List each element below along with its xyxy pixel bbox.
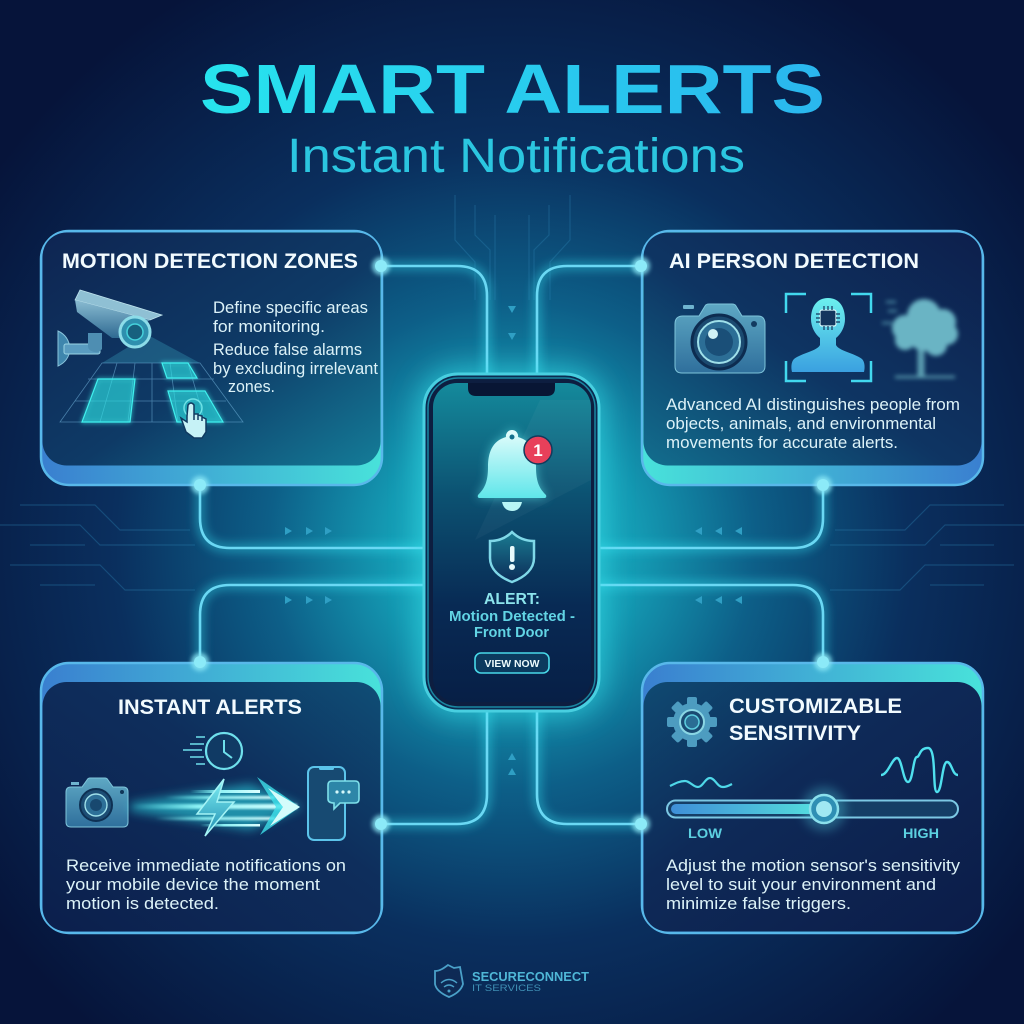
body text: Adjust the motion sensor's sensitivity	[666, 857, 961, 875]
button: view now	[475, 653, 549, 673]
body text: zones.	[228, 378, 275, 396]
icon: notification badge	[524, 436, 552, 464]
logo: SecureConnect IT Services: IT SERVICES	[472, 983, 541, 993]
body text: level to suit your environment and	[666, 876, 936, 894]
body text: motion is detected.	[66, 895, 219, 913]
heading: MOTION DETECTION ZONES	[62, 250, 358, 273]
body text: Advanced AI distinguishes people from	[666, 396, 960, 414]
slider labels: HIGH	[903, 825, 939, 841]
slider labels: LOW	[688, 825, 723, 841]
icon: camera	[66, 778, 128, 827]
panel: AI person detection	[642, 231, 983, 485]
heading: SENSITIVITY	[729, 722, 861, 745]
icon: bell	[478, 430, 546, 511]
heading	[729, 695, 902, 745]
body text	[666, 396, 960, 452]
body text: movements for accurate alerts.	[666, 434, 898, 452]
body text: Define specific areas	[213, 299, 368, 317]
body text: by excluding irrelevant	[213, 360, 378, 378]
body text	[213, 299, 378, 396]
icon: notification badge: 1	[533, 441, 543, 460]
body text: minimize false triggers.	[666, 895, 851, 913]
body text: your mobile device the moment	[66, 876, 320, 894]
panel: motion detection zones	[41, 231, 382, 485]
slider	[667, 787, 958, 831]
alert text: ALERT:	[484, 591, 540, 608]
icon: high wave	[881, 748, 958, 792]
subtitle: Instant Notifications	[287, 130, 745, 183]
alert text	[449, 591, 575, 641]
alert text: Front Door	[474, 625, 549, 641]
icon: lightning bolt	[197, 779, 234, 836]
icon: low wave	[670, 778, 732, 787]
body text: objects, animals, and environmental	[666, 415, 936, 433]
connector nodes	[191, 257, 832, 833]
alert text: Motion Detected -	[449, 609, 575, 625]
heading: AI PERSON DETECTION	[669, 250, 919, 273]
body text: for monitoring.	[213, 318, 325, 336]
icon: gear	[667, 697, 717, 747]
icon: shield alert	[490, 532, 534, 582]
icon: phone with chat bubble	[308, 767, 359, 840]
body text: Receive immediate notifications on	[66, 857, 346, 875]
icon: security camera and floor grid	[58, 290, 243, 438]
flow arrows	[285, 306, 742, 775]
notch	[468, 383, 555, 396]
logo: SecureConnect IT Services: SECURECONNECT	[472, 970, 589, 984]
icon: fast clock	[183, 733, 242, 769]
slider labels	[688, 825, 939, 841]
circuit traces	[0, 195, 1024, 590]
title: SMART ALERTS	[200, 50, 825, 128]
body text: Reduce false alarms	[213, 341, 362, 359]
icon: camera	[675, 304, 765, 373]
arrow: speed streaks	[130, 777, 302, 835]
heading: INSTANT ALERTS	[118, 696, 302, 719]
icon: blurred tree	[882, 299, 958, 378]
connector lines	[200, 266, 823, 824]
body text	[66, 857, 346, 913]
logo: SecureConnect IT Services	[435, 965, 589, 997]
connector: glow	[200, 266, 823, 824]
button: view now: VIEW NOW	[484, 658, 540, 670]
phone	[418, 368, 605, 717]
body text	[666, 857, 961, 913]
panel: instant alerts	[41, 663, 382, 933]
heading: CUSTOMIZABLE	[729, 695, 902, 718]
panel: customizable sensitivity	[642, 663, 983, 933]
icon: person with AI chip	[786, 294, 871, 381]
